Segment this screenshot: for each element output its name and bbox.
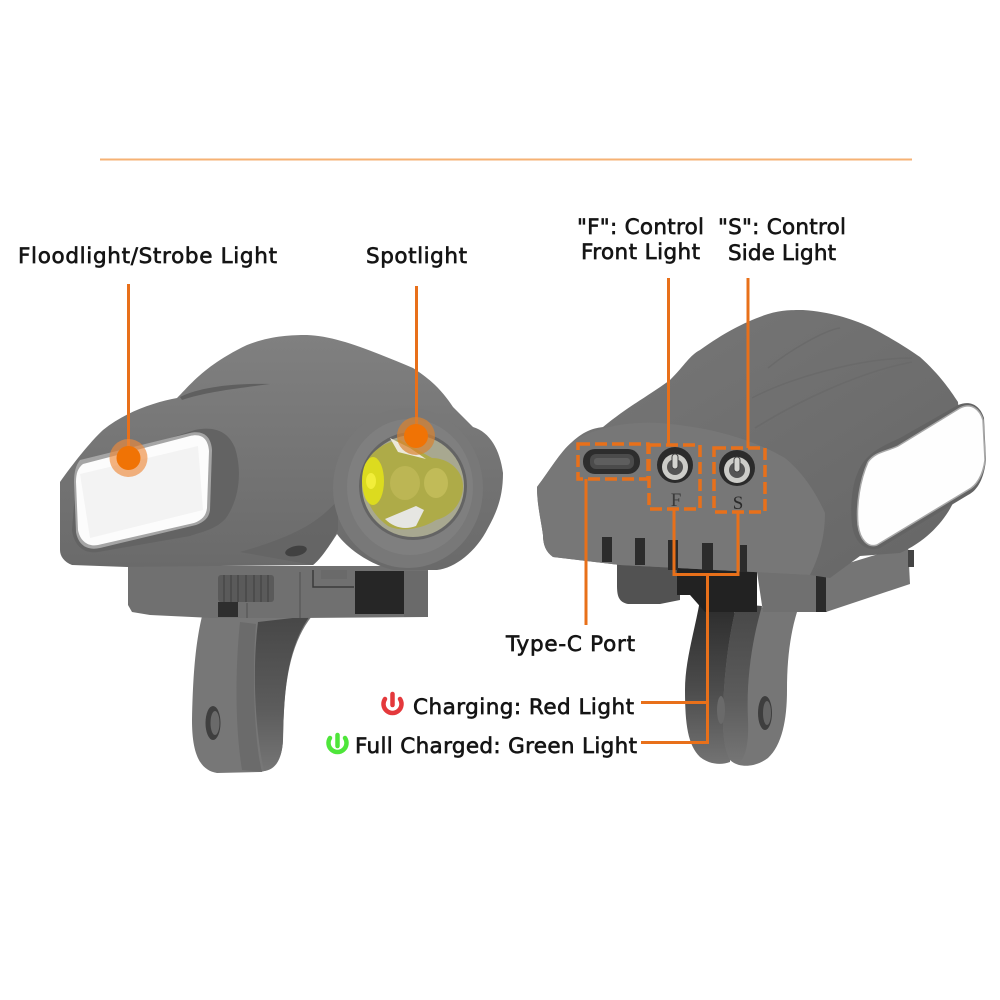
callout: S button dashed box and leader <box>714 278 765 512</box>
label: type-c port: Type-C Port <box>505 632 635 657</box>
main housing <box>537 310 963 578</box>
label: floodlight: Floodlight/Strobe Light <box>18 244 277 269</box>
label: F button <box>577 215 704 265</box>
type-c port <box>583 449 640 474</box>
floodlight lens <box>74 432 212 549</box>
housing crease highlight <box>180 384 270 400</box>
screw hole <box>284 544 308 558</box>
callout: charging indicator leaders <box>641 510 738 742</box>
power button S <box>719 450 755 486</box>
button letter F: F <box>671 490 681 511</box>
floodlight housing <box>72 429 239 552</box>
icon: red power <box>384 694 402 713</box>
label: F button: Front Light <box>581 240 700 265</box>
spotlight ring <box>333 408 483 568</box>
label: charging: Charging: Red Light <box>413 695 634 720</box>
device: front view <box>60 335 503 773</box>
side light housing <box>851 403 986 549</box>
side light lens <box>857 406 985 546</box>
label: S button <box>718 215 846 266</box>
mounting clamp <box>128 566 428 618</box>
vent notches <box>602 537 747 572</box>
callout: type-c dashed box and leader <box>578 444 648 625</box>
power button F <box>657 447 693 483</box>
label: F button: "F": Control <box>577 215 704 240</box>
device: rear view <box>537 310 986 766</box>
mounting clamp <box>617 545 914 612</box>
mounting arm <box>192 612 312 773</box>
callout: spotlight marker <box>397 286 435 455</box>
top divider line <box>100 158 912 160</box>
housing crease lines <box>752 328 912 428</box>
label: spotlight: Spotlight <box>366 244 467 269</box>
callout: floodlight marker <box>110 284 148 477</box>
mounting arm <box>685 600 797 766</box>
button letter S: S <box>733 493 743 514</box>
label: S button: "S": Control <box>718 215 846 240</box>
icon: green power <box>328 735 346 752</box>
housing front face <box>537 423 825 575</box>
label: full charged: Full Charged: Green Light <box>355 734 637 759</box>
main housing <box>60 335 503 570</box>
label: S button: Side Light <box>728 241 836 266</box>
housing lower shadow <box>240 500 338 565</box>
callout: F button dashed box and leader <box>649 278 700 509</box>
